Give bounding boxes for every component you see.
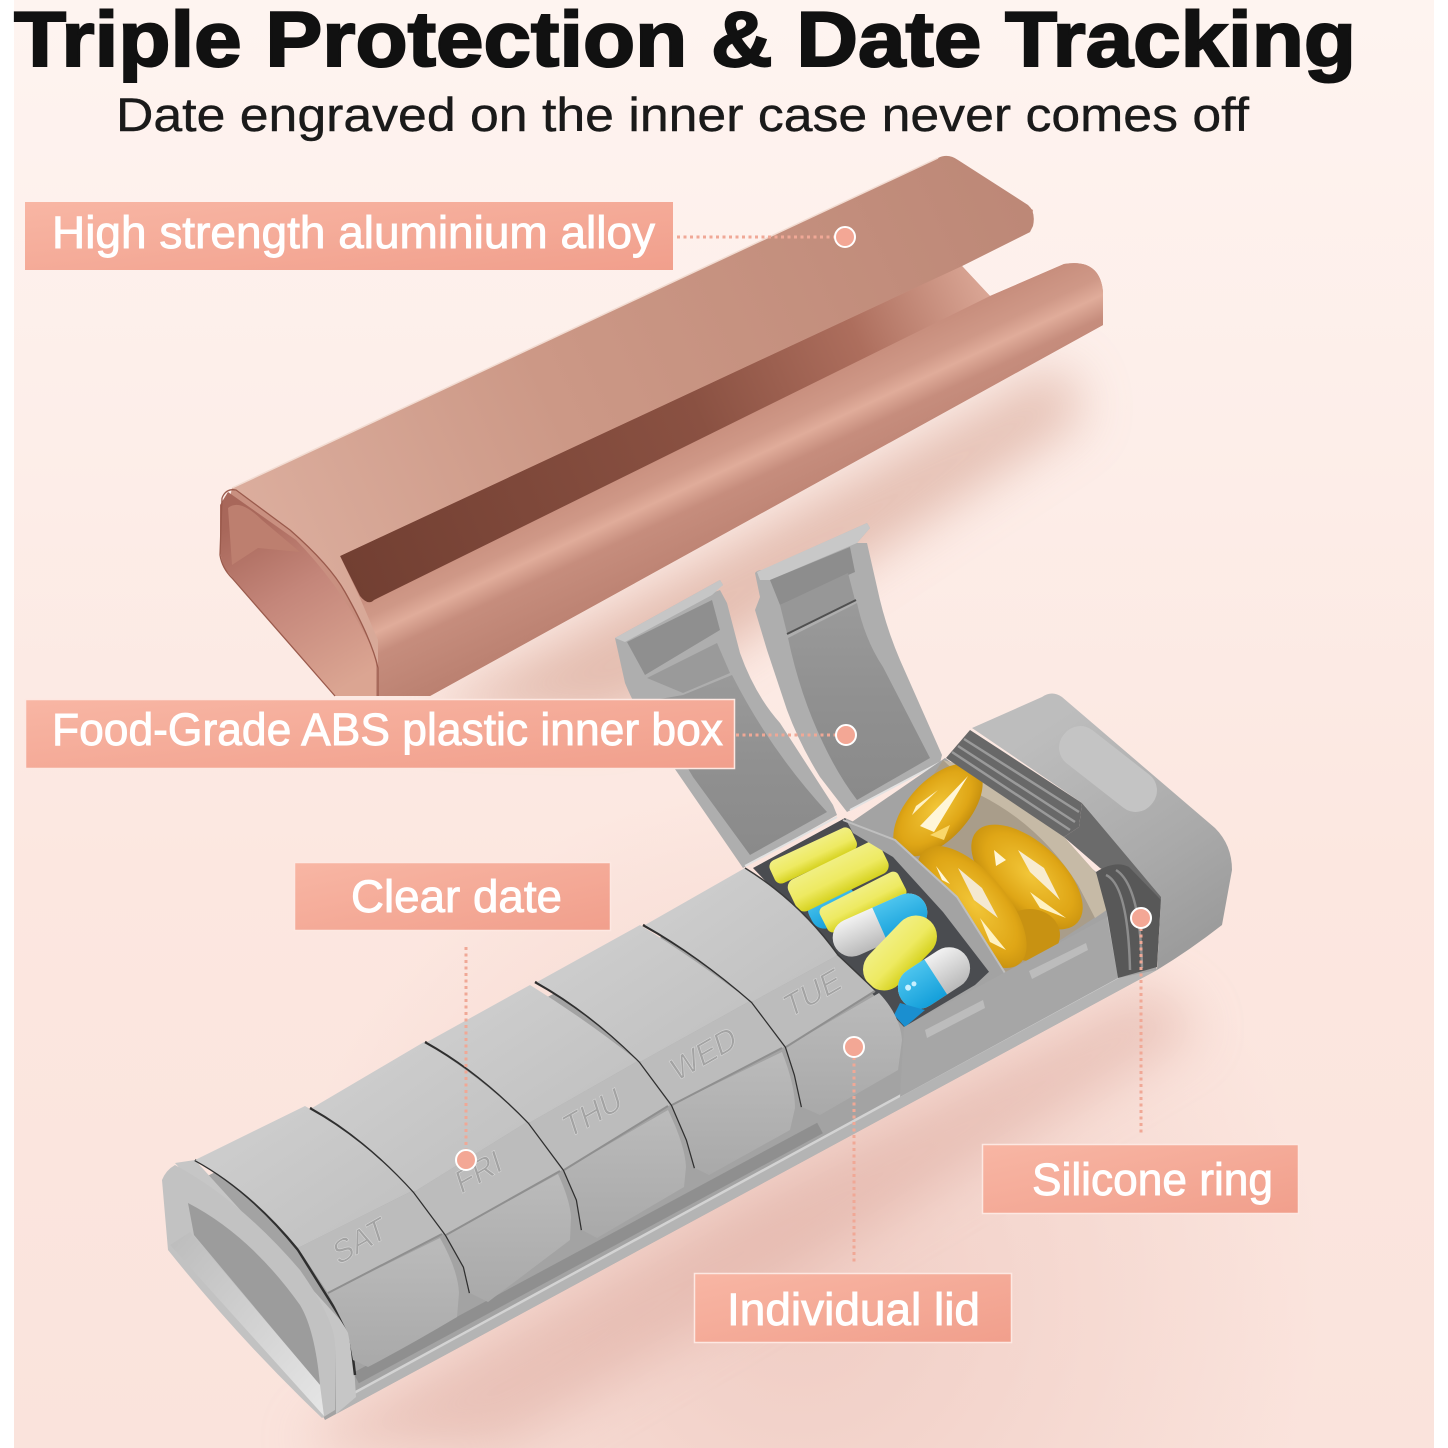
blue and white capsule front — [890, 939, 978, 1017]
cap dent — [1051, 718, 1165, 820]
day labels: WED — [667, 1019, 740, 1089]
lid TUE — [643, 868, 902, 1115]
callout: ABS inner box — [26, 700, 856, 768]
case slot — [340, 266, 990, 602]
subtitle: Date engraved on the inner case never comes off — [116, 88, 1250, 141]
lid SAT — [195, 1106, 459, 1375]
lid FRI — [310, 1042, 571, 1302]
softgel front — [898, 828, 1046, 986]
aluminium outer case — [220, 156, 1103, 720]
open lid left — [615, 580, 837, 868]
day labels: TUE — [780, 961, 845, 1025]
case front opening — [220, 492, 378, 696]
case shadow — [420, 365, 1085, 720]
callout: individual lid — [694, 1037, 1012, 1342]
lid lip — [757, 523, 870, 580]
callout: silicone ring: Silicone ring — [1032, 1154, 1273, 1205]
right compartment — [877, 748, 1111, 986]
front wall — [900, 905, 1132, 1097]
callout: aluminium alloy: High strength aluminium alloy — [52, 207, 656, 258]
box bottom lip — [336, 970, 1157, 1414]
callout: clear date: Clear date — [351, 871, 562, 922]
day labels: THU — [560, 1080, 626, 1146]
box shadow — [300, 985, 1200, 1448]
callout: clear date — [294, 862, 610, 1170]
case body base — [220, 156, 1103, 696]
day labels: FRI — [452, 1143, 506, 1201]
case rim highlight — [232, 158, 938, 488]
callout: aluminium alloy — [25, 202, 855, 270]
left end opening — [162, 1165, 335, 1418]
lid lip — [615, 580, 723, 642]
blue and white capsule — [827, 887, 933, 963]
right end cap — [972, 694, 1232, 970]
left end rim — [175, 1160, 356, 1414]
yellow tablets — [767, 825, 909, 934]
compartment divider — [845, 818, 1005, 977]
box body — [200, 758, 1157, 1420]
open lid right — [755, 523, 942, 812]
yellow oblong pill — [854, 907, 946, 999]
callout: silicone ring — [982, 908, 1298, 1214]
case side face — [355, 263, 1103, 696]
callout: ABS inner box: Food-Grade ABS plastic inner box — [52, 704, 723, 755]
pill box — [162, 523, 1232, 1448]
case opening outline — [220, 490, 378, 696]
dark neck with silicone ring — [946, 730, 1161, 978]
lid THU — [425, 985, 686, 1238]
callout: individual lid: Individual lid — [727, 1284, 980, 1335]
softgel right — [953, 805, 1101, 949]
left compartment — [753, 818, 993, 1027]
softgel bottom — [1000, 909, 1060, 961]
case inner wall — [228, 505, 300, 565]
softgel back — [877, 748, 999, 872]
day labels: SAT — [329, 1210, 390, 1272]
compartment rim line — [843, 820, 1005, 973]
day labels — [329, 961, 845, 1272]
lid WED — [535, 925, 795, 1175]
blue capsule back — [803, 881, 863, 933]
case top lip — [232, 156, 1034, 668]
